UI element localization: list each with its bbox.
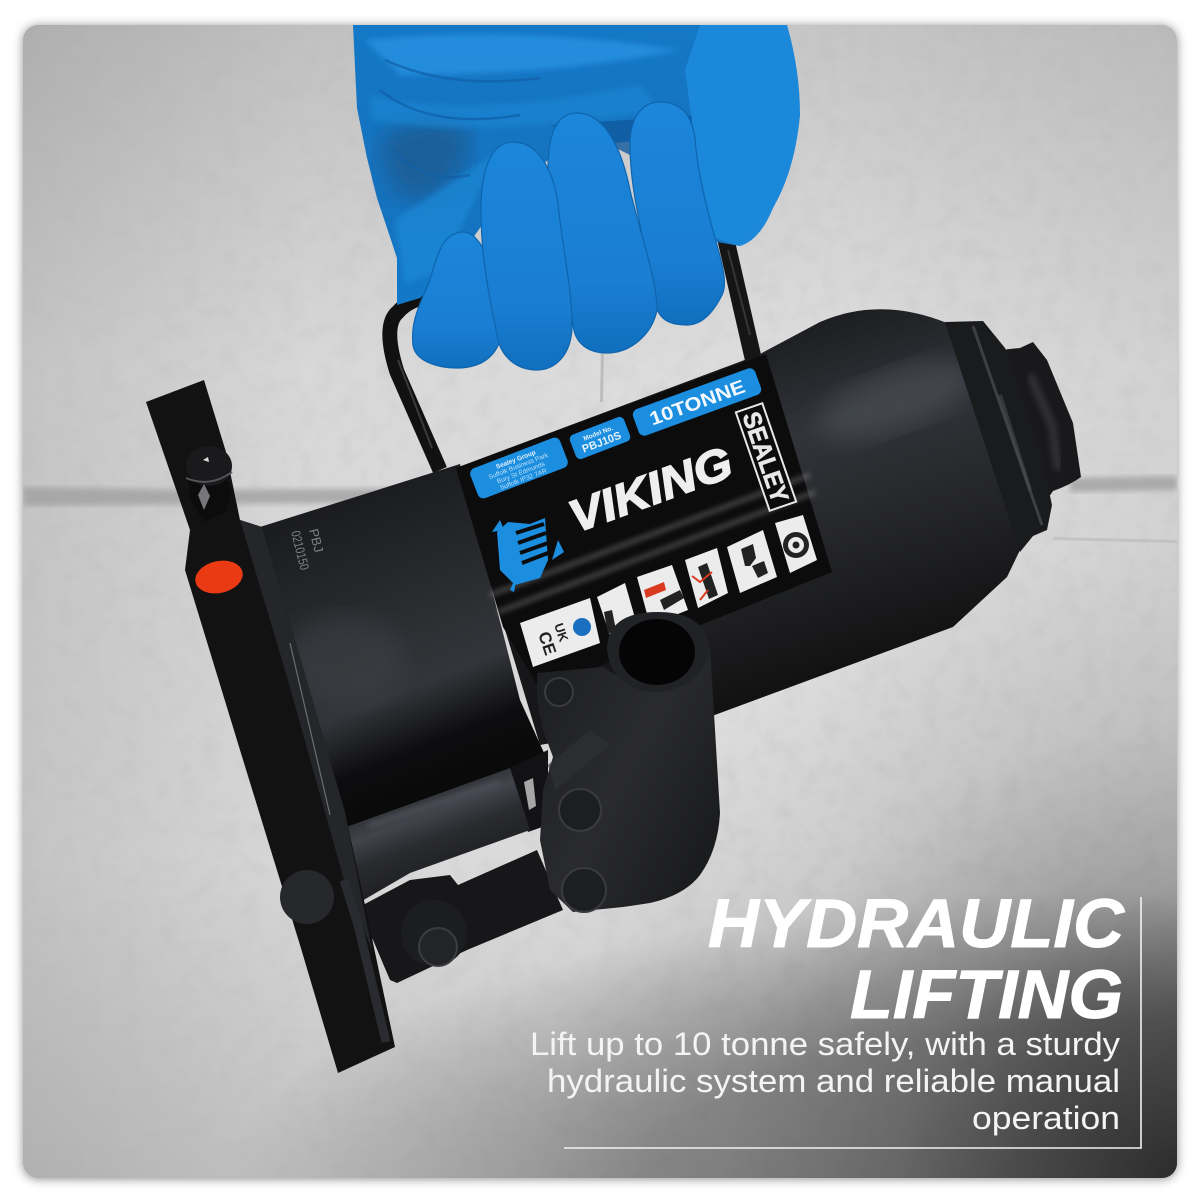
pill: company address: Sealey Group [495,449,537,471]
pill: company address [468,436,570,500]
plate bolt [280,870,334,924]
jack: cylinder body [260,309,1020,838]
wordmark: viking: VIKING [562,436,739,542]
pill: capacity [631,367,763,437]
pill: model number: Model No. [583,425,614,443]
wordmark: sealey box: SEALEY [737,408,794,507]
thumb side [685,25,800,246]
jack: carry handle [390,240,754,470]
engraved marking: 0210150 [288,529,312,572]
heading [708,885,1125,1033]
safety icons row: UK [551,621,572,644]
pill: company address: Suffolk IP32 7AR [499,467,548,492]
jack: pump piston and lower link [338,768,563,983]
jack: end cap and ram nut [945,321,1081,552]
hand in blue nitrile glove [353,25,800,370]
heading: HYDRAULIC [708,885,1125,962]
body description [530,1026,1120,1136]
jack: base plate [146,380,395,1073]
body description: operation [972,1100,1120,1136]
pill: model number [568,415,632,461]
bolts [545,678,606,912]
gripping fingers [413,102,724,370]
pill: capacity: 10TONNE [647,376,748,430]
engraved marking: PBJ [306,527,326,554]
jack: label sticker [456,354,832,690]
palm and wrist [353,25,800,305]
pill: company address: Bury St Edmunds [496,461,547,485]
jack: pump socket with bolts [537,612,720,912]
corner frame rule [564,897,1141,1148]
icon: viking ship logo [492,518,564,592]
text block: hydraulic lifting [708,885,1125,1033]
red plug [192,556,246,598]
engraved marking [288,527,326,572]
release valve knob [186,446,232,522]
pill: model number: PBJ10S [581,430,623,456]
safety icons row: CE [534,629,560,658]
pill: company address: Suffolk Business Park [488,452,550,481]
body description: hydraulic system and reliable manual [547,1063,1120,1099]
heading: LIFTING [850,956,1123,1033]
body description: Lift up to 10 tonne safely, with a sturdy [530,1026,1120,1062]
safety icons row [520,515,817,667]
